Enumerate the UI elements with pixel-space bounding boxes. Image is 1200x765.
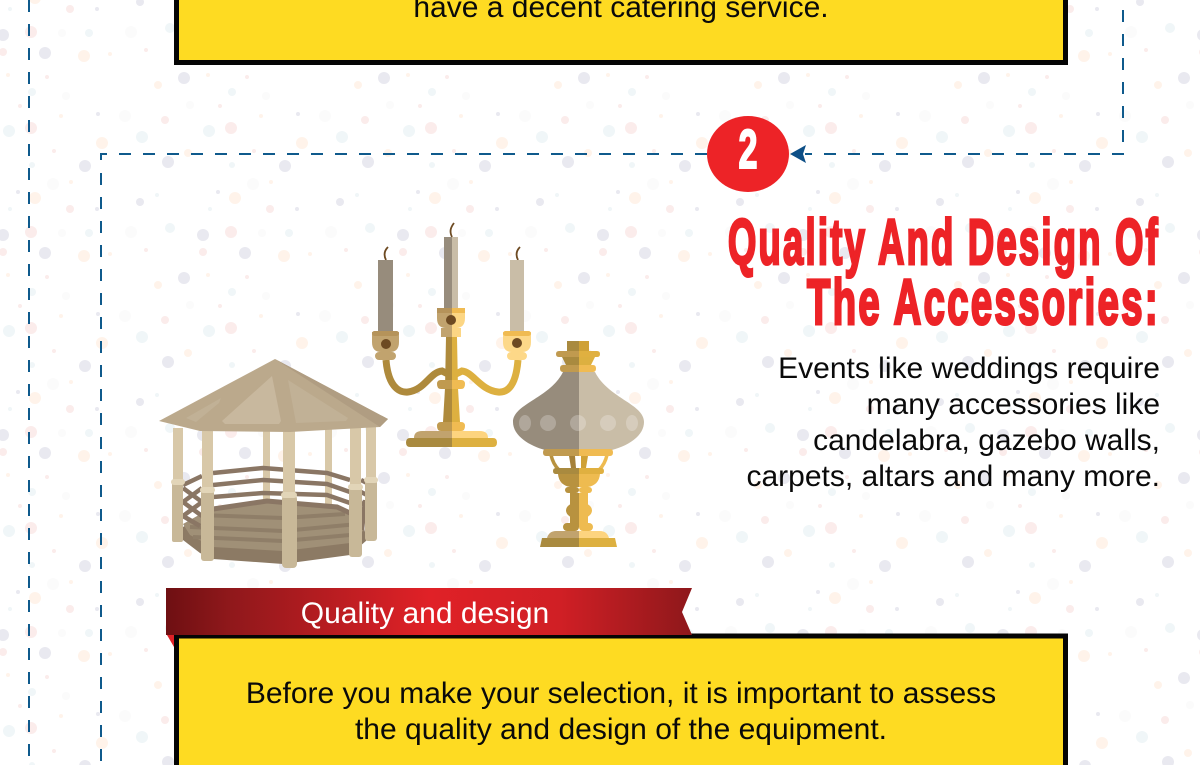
heading [728,206,1160,338]
lower yellow box: Before you make your selection, it is important to assess [246,677,996,710]
lower yellow box [176,636,1066,765]
icon: gazebo [159,359,388,568]
body text: candelabra, gazebo walls, [813,424,1160,457]
body text: many accessories like [867,388,1160,421]
top yellow box [176,0,1066,62]
body text: Events like weddings require [778,352,1160,385]
ribbon: quality and design: Quality and design [301,597,549,630]
lower yellow box: the quality and design of the equipment. [355,713,887,746]
body text [746,352,1160,493]
arrow head [790,145,806,163]
ribbon: quality and design [166,588,692,647]
icon: oil lamp [513,341,644,547]
number badge 2 [707,116,789,192]
body text: carpets, altars and many more. [746,460,1160,493]
icon: candelabra [372,223,531,447]
number badge 2: 2 [738,118,758,180]
